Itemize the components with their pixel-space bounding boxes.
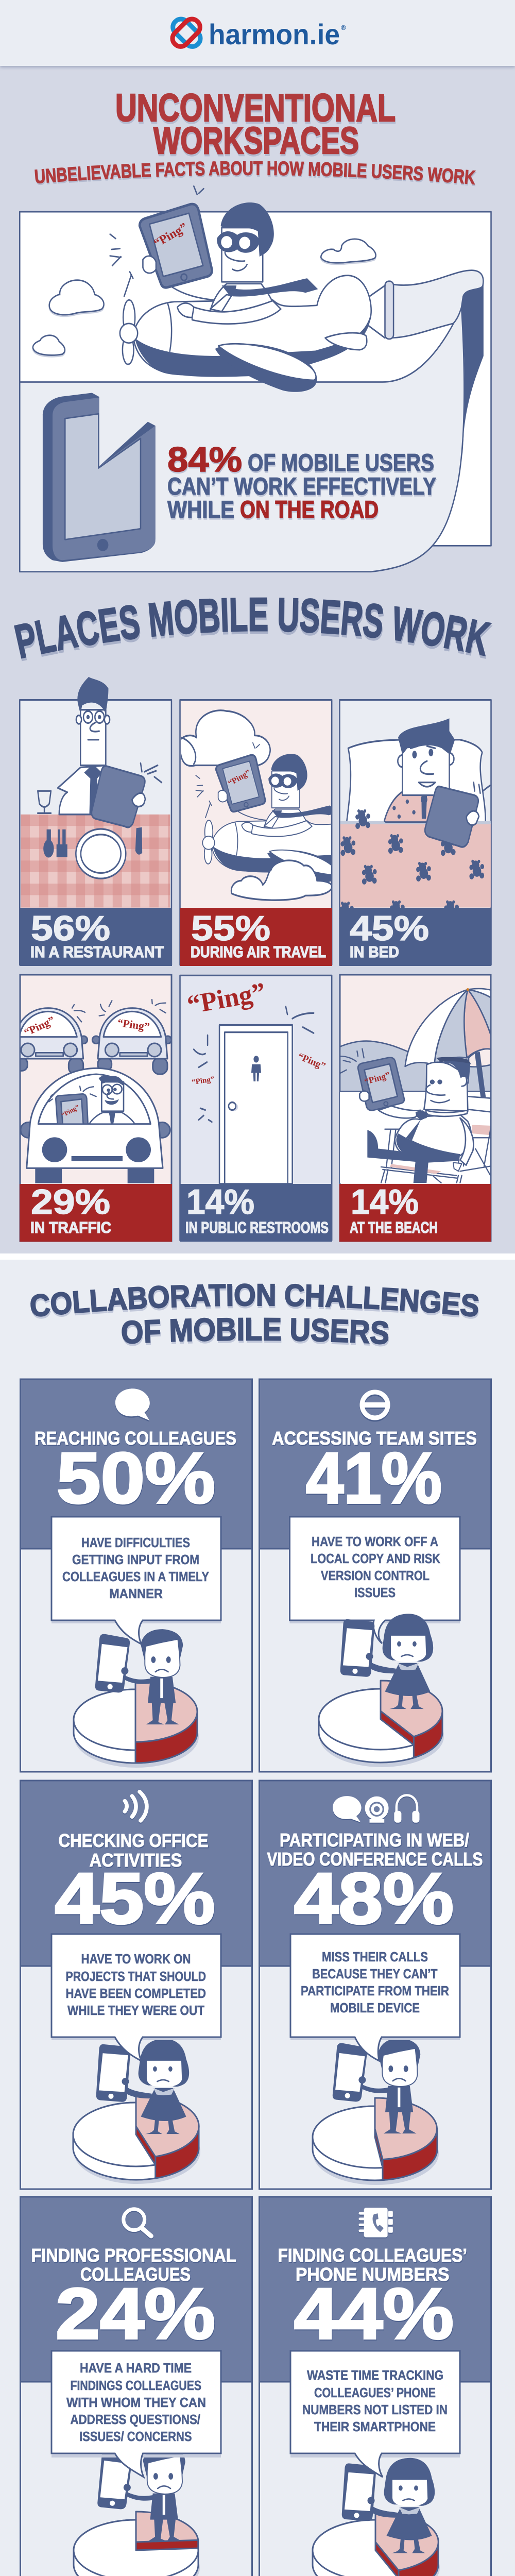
- callout: PARTICIPATE FROM THEIR: [301, 1983, 449, 1998]
- ping lines on cars: [72, 999, 166, 1022]
- bears: [339, 809, 484, 921]
- label: 29 percent: [20, 1184, 172, 1242]
- chairs: [472, 1125, 491, 1135]
- callout: BECAUSE THEY CAN’T: [312, 1966, 438, 1981]
- ping text: right of door: “Ping”: [296, 1051, 327, 1072]
- figure: woman with phone: [96, 2039, 189, 2134]
- panel: finding professional colleagues: [21, 2197, 252, 2576]
- panel: in traffic: IN TRAFFIC: [30, 1218, 111, 1236]
- table lines: [468, 1096, 491, 1112]
- cutlery: [43, 827, 142, 858]
- plane body: [133, 276, 371, 375]
- figure: woman with phone: [342, 2458, 435, 2553]
- pilot torso: [210, 284, 274, 318]
- panel: in a restaurant: 56%: [31, 909, 110, 948]
- title: UNCONVENTIONAL: [115, 86, 396, 129]
- panel: in a restaurant: [20, 677, 172, 966]
- panel: at the beach: “Ping”: [363, 1070, 391, 1087]
- panel: accessing team sites: [260, 1379, 491, 1772]
- tablet: [140, 204, 212, 287]
- card heading: PHONE NUMBERS: [296, 2264, 449, 2285]
- propeller: [123, 300, 135, 335]
- hills: [340, 1041, 491, 1091]
- pie chart: 50 percent: [74, 1681, 199, 1768]
- panel: at the beach: AT THE BEACH: [350, 1218, 438, 1236]
- figure: woman with phone: [340, 1614, 433, 1709]
- tail wing: [325, 333, 367, 350]
- ping lines: [110, 186, 203, 296]
- callout: HAVE A HARD TIME: [80, 2360, 192, 2376]
- heading: collaboration challenges: OF MOBILE USERS: [122, 1318, 389, 1347]
- streaming tie: [227, 278, 318, 297]
- callout: GETTING INPUT FROM: [72, 1552, 199, 1567]
- legs: [367, 1130, 460, 1183]
- callout: ISSUES/ CONCERNS: [79, 2429, 192, 2444]
- panel: in a restaurant: IN A RESTAURANT: [30, 943, 164, 961]
- card heading: CHECKING OFFICE: [59, 1830, 208, 1851]
- callout: VERSION CONTROL: [321, 1568, 430, 1583]
- callout: [289, 1517, 460, 1643]
- panel: in bed: 45%: [350, 909, 429, 948]
- figure: man with phone: [97, 2446, 185, 2541]
- title: [115, 86, 396, 162]
- heading: collaboration challenges: [30, 1283, 479, 1347]
- blanket: [340, 823, 491, 908]
- callout: THEIR SMARTPHONE: [314, 2419, 436, 2434]
- icon: magnifier: [124, 2209, 151, 2236]
- stat: 84 percent of mobile users: 84%: [167, 440, 242, 479]
- callout: HAVE BEEN COMPLETED: [66, 1986, 206, 2001]
- callout: HAVE TO WORK ON: [81, 1951, 191, 1967]
- pie chart: 48 percent: [313, 2098, 439, 2185]
- callout: [290, 2351, 460, 2477]
- card heading: [272, 1428, 477, 1518]
- icon: large tablet: [43, 393, 156, 562]
- card heading: ACCESSING TEAM SITES: [272, 1428, 477, 1449]
- callout: MOBILE DEVICE: [330, 2000, 420, 2015]
- card heading: REACHING COLLEAGUES: [35, 1428, 236, 1449]
- pie chart: 24 percent: [74, 2512, 200, 2576]
- card heading: COLLEAGUES: [80, 2264, 191, 2285]
- card heading: [31, 2245, 236, 2354]
- callout: MANNER: [109, 1586, 163, 1601]
- ping text on cars: “Ping”: [22, 1014, 57, 1039]
- umbrella: [469, 988, 490, 996]
- panel: in traffic: 29%: [31, 1182, 110, 1222]
- callout: NUMBERS NOT LISTED IN: [302, 2402, 448, 2417]
- banner flag: [389, 270, 483, 338]
- icon: signal waves: [125, 1792, 147, 1821]
- clouds: [33, 239, 376, 355]
- card heading: 50%: [57, 1437, 215, 1518]
- tablet: [425, 786, 478, 847]
- label: 55 percent: [180, 908, 332, 966]
- banner fold: [461, 284, 484, 455]
- panel: plane banner hero: [20, 186, 491, 572]
- title: WORKSPACES: [153, 120, 359, 162]
- sky panel: [20, 212, 491, 546]
- registered mark: ®: [341, 24, 346, 31]
- illustration: pilot and clouds: “Ping”: [227, 768, 252, 788]
- callout: [290, 1934, 460, 2061]
- stat: 84 percent of mobile users: [167, 440, 436, 523]
- car: top right: [92, 1008, 171, 1074]
- callout: PROJECTS THAT SHOULD: [66, 1969, 206, 1984]
- card heading: 44%: [294, 2273, 454, 2354]
- panel: in bed: IN BED: [350, 943, 399, 961]
- panel: in traffic: [8, 975, 172, 1242]
- driver: [89, 1112, 135, 1124]
- sand: [340, 1091, 491, 1183]
- callout: HAVE DIFFICULTIES: [81, 1535, 190, 1550]
- callout: MISS THEIR CALLS: [322, 1949, 428, 1964]
- umbrella back and pole: [469, 1049, 491, 1067]
- logo wordmark: harmon.ie: [209, 18, 340, 50]
- icon: address book: [360, 2208, 393, 2238]
- callout: HAVE TO WORK OFF A: [312, 1534, 438, 1549]
- card heading: 48%: [294, 1858, 454, 1939]
- panel: in traffic: “Ping”: [60, 1104, 80, 1118]
- card heading: 41%: [306, 1437, 442, 1518]
- banner sheet: [20, 307, 464, 572]
- arm: [379, 1106, 421, 1118]
- pillow: [347, 740, 486, 823]
- panel: in bed: [339, 700, 491, 966]
- callout: COLLEAGUES’ PHONE: [314, 2385, 436, 2400]
- subtitle: UNBELIEVABLE FACTS ABOUT HOW MOBILE USERS WORK: [35, 161, 476, 187]
- card heading: 45%: [55, 1858, 215, 1939]
- panel: in public restrooms: [180, 975, 332, 1242]
- card heading: 24%: [56, 2273, 215, 2354]
- label: 14 percent restrooms: [180, 1184, 332, 1242]
- icon: harmon.ie logo: [169, 16, 203, 50]
- heading: places mobile users work: PLACES MOBILE USERS WORK: [14, 598, 492, 662]
- callout: WITH WHOM THEY CAN: [66, 2395, 206, 2410]
- pilot head: [222, 228, 263, 282]
- card heading: [55, 1830, 215, 1939]
- icon: no entry: [362, 1392, 388, 1418]
- panel: reaching colleagues: [21, 1379, 252, 1772]
- plate: [76, 829, 126, 878]
- card heading: FINDING PROFESSIONAL: [31, 2245, 236, 2266]
- car: foreground: [21, 1121, 30, 1139]
- stat: 84 percent of mobile users: OF MOBILE USERS: [248, 449, 434, 476]
- waiter torso: [58, 765, 113, 815]
- panel: participating in web/video conference calls: [260, 1781, 491, 2189]
- card heading: [35, 1428, 236, 1518]
- header bar with logo: [0, 0, 515, 66]
- pie chart: 44 percent: [313, 2512, 440, 2576]
- car: top left: [21, 1007, 89, 1073]
- label: 14 percent beach: [339, 1184, 491, 1242]
- arm: [192, 301, 281, 324]
- icon: speech bubble: [115, 1388, 150, 1420]
- pie chart: 41 percent: [319, 1681, 444, 1767]
- callout: [52, 1934, 221, 2061]
- label: 45 percent: [339, 908, 491, 966]
- panel: during air travel: 55%: [191, 909, 270, 948]
- door: [219, 1025, 293, 1184]
- panel: during air travel: [179, 699, 333, 966]
- ping lines: [340, 1049, 364, 1073]
- panel: at the beach: 14%: [351, 1182, 419, 1222]
- icon: restroom man: [251, 1056, 261, 1081]
- card heading: [267, 1829, 483, 1939]
- panel: in public restrooms: IN PUBLIC RESTROOMS: [185, 1218, 329, 1236]
- pie chart: 45 percent: [73, 2094, 200, 2184]
- panel: checking office activities: [21, 1781, 252, 2189]
- callout: COLLEAGUES IN A TIMELY: [62, 1569, 209, 1584]
- panel: at the beach: [339, 975, 491, 1242]
- panel: during air travel: DURING AIR TRAVEL: [191, 943, 326, 961]
- callout: [52, 2351, 221, 2477]
- callout: LOCAL COPY AND RISK: [311, 1551, 440, 1566]
- card heading: ACTIVITIES: [90, 1850, 182, 1871]
- ping text: “Ping”: [151, 221, 190, 250]
- tablecloth: [21, 815, 170, 908]
- icons: chat, webcam, headset: [333, 1795, 419, 1823]
- tablet in car: [56, 1094, 88, 1124]
- man body: [395, 1114, 471, 1156]
- illustration: pilot in plane: [110, 186, 385, 392]
- illustration: pilot and clouds: [181, 709, 331, 901]
- callout: WASTE TIME TRACKING: [307, 2367, 443, 2383]
- panel: in traffic: “Ping”: [117, 1016, 150, 1033]
- callout: FINDINGS COLLEAGUES: [70, 2378, 201, 2393]
- label: 56 percent: [20, 908, 172, 966]
- card heading: PARTICIPATING IN WEB/: [280, 1829, 469, 1851]
- callout: WHILE THEY WERE OUT: [67, 2003, 204, 2018]
- head: [80, 710, 106, 765]
- callout: ADDRESS QUESTIONS/: [70, 2412, 200, 2427]
- ping text: above door: “Ping”: [185, 977, 268, 1020]
- wine glass: [38, 791, 51, 813]
- stat: 84 percent of mobile users: WHILE: [167, 496, 234, 523]
- stat: 84 percent of mobile users: CAN’T WORK EFFECTIVELY: [167, 472, 436, 500]
- stat: 84 percent of mobile users: ON THE ROAD: [240, 496, 379, 523]
- ping lines: [194, 1007, 314, 1122]
- callout: ISSUES: [354, 1585, 396, 1600]
- figure: man with phone: [333, 2038, 420, 2133]
- ping text: left of door: “Ping”: [191, 1075, 215, 1087]
- tablet: [92, 766, 145, 827]
- heading: collaboration challenges: COLLABORATION CHALLENGES: [30, 1283, 479, 1319]
- tablet: [358, 1058, 404, 1110]
- card heading: FINDING COLLEAGUES’: [278, 2245, 467, 2266]
- pajamas: [384, 790, 438, 822]
- tie: [84, 764, 102, 814]
- head: [398, 755, 407, 767]
- card heading: [278, 2245, 467, 2354]
- wing: [215, 344, 317, 392]
- figure: man with phone: [95, 1629, 183, 1724]
- head: [424, 1062, 468, 1111]
- callout: [52, 1517, 221, 1644]
- panel: finding colleagues' phone numbers: [260, 2197, 491, 2576]
- panel: in public restrooms: 14%: [186, 1182, 254, 1222]
